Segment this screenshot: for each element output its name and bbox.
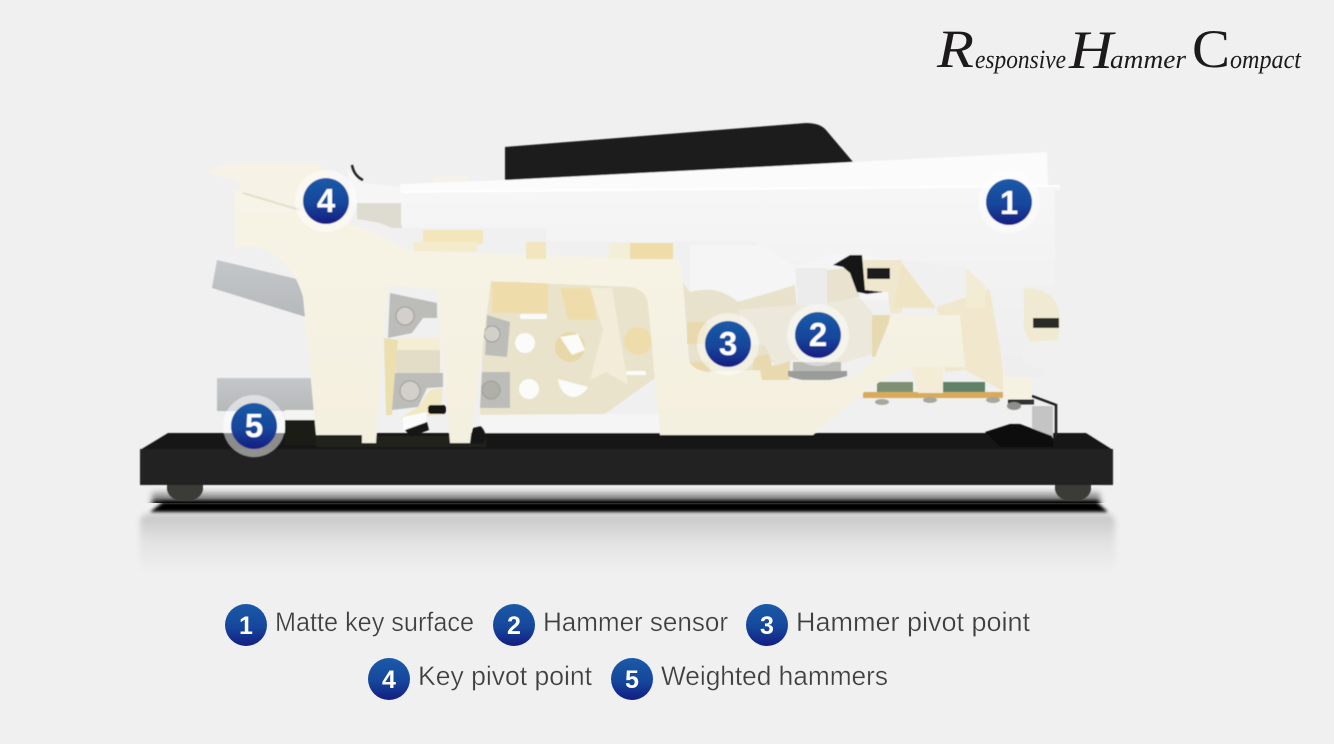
- legend item 4: [368, 658, 592, 700]
- frame shadow line: [243, 193, 300, 210]
- legend item 5: Weighted hammers: [661, 661, 888, 691]
- metal bracket: [1007, 396, 1056, 440]
- upper weight: [212, 260, 306, 317]
- lower support columns: [910, 366, 943, 393]
- right guide: [609, 243, 633, 259]
- cream triangle: [893, 263, 936, 308]
- felt and damper: [285, 410, 486, 447]
- marker 2: [787, 304, 849, 366]
- legend item 4: 4: [382, 666, 396, 694]
- lower left amber strip: [384, 338, 398, 415]
- inner slots: [520, 314, 646, 375]
- hinge shade: [357, 203, 402, 228]
- legend item 5: [611, 658, 888, 700]
- right side mechanism: [683, 255, 1060, 447]
- mid beige block: [396, 350, 440, 374]
- key top surface: [400, 152, 1048, 192]
- PCB: [863, 382, 1003, 405]
- metal hammer weights: [212, 260, 486, 447]
- title: C: [1192, 19, 1230, 79]
- cream rear tail: [207, 163, 350, 225]
- legend item 4: Key pivot point: [418, 661, 592, 691]
- key rib: [966, 268, 985, 308]
- legend item 1: Matte key surface: [275, 607, 474, 637]
- title: esponsive: [975, 45, 1066, 74]
- rubber feet: [167, 484, 1091, 501]
- legend item 5: 5: [625, 666, 639, 694]
- black hardware between legs: [405, 405, 486, 444]
- legend item 2: [493, 604, 728, 646]
- felt mount: [862, 260, 902, 313]
- hinge top block: [433, 176, 467, 186]
- screws: [396, 307, 500, 401]
- cream key frame: [235, 190, 965, 443]
- piano key action illustration: [140, 123, 1113, 501]
- top guide pieces: [413, 230, 673, 259]
- key connector: [1003, 375, 1031, 399]
- beige cam: [827, 268, 860, 303]
- marker 4: 4: [317, 182, 336, 219]
- legend item 1: 1: [239, 612, 253, 640]
- marker 1: 1: [1000, 184, 1018, 221]
- left guide upper: [423, 230, 483, 244]
- hinge white arm: [347, 167, 402, 205]
- hinge black mark: [352, 165, 363, 180]
- floor band under base: [152, 485, 1100, 503]
- marker 5: [223, 395, 285, 457]
- upper hammer plate: [388, 293, 437, 338]
- key edge highlight: [402, 186, 1060, 192]
- hammer mass: [480, 281, 655, 415]
- title: R: [936, 19, 974, 79]
- lower hammer plate right: [480, 372, 510, 408]
- lower cream lever: [400, 388, 442, 418]
- marker 3: [697, 313, 759, 375]
- open window behind action: [480, 245, 900, 433]
- sensor stem: [795, 268, 827, 305]
- base front face: [140, 449, 1113, 485]
- rear hammer disc: [683, 283, 800, 372]
- lower hammer plate: [392, 373, 443, 410]
- legend item 2: 2: [507, 612, 521, 640]
- marker 1: [978, 171, 1040, 233]
- mid cream block: [398, 338, 440, 350]
- black regulating part: [833, 255, 883, 294]
- base top face: [140, 433, 1113, 450]
- amber guide: [630, 243, 673, 259]
- number markers: [223, 170, 1040, 457]
- legend item 2: Hammer sensor: [543, 607, 728, 637]
- legend item 3: [746, 604, 1030, 646]
- marker 5: 5: [245, 407, 263, 444]
- white struts: [590, 288, 628, 385]
- small guide: [526, 242, 546, 259]
- left guide lower: [413, 242, 477, 252]
- legend item 3: 3: [760, 612, 774, 640]
- holes: [515, 333, 588, 399]
- hammer inner body: [384, 281, 655, 444]
- key hinge: [347, 165, 467, 228]
- lower weight: [217, 378, 315, 411]
- amber inner parts: [492, 282, 652, 355]
- bracket clip: [985, 424, 1054, 447]
- legend item 1: [225, 604, 474, 646]
- legend item 3: Hammer pivot point: [796, 607, 1030, 637]
- title: ompact: [1230, 45, 1302, 74]
- white hammer arm: [738, 298, 873, 366]
- marker 2: 2: [809, 316, 827, 353]
- marker 3: 3: [719, 325, 737, 362]
- title: ammer: [1110, 45, 1187, 74]
- white gap: [403, 412, 427, 430]
- title: H: [1068, 20, 1116, 80]
- amber behind curve: [872, 315, 892, 357]
- base plate: [140, 433, 1113, 501]
- amber lower parts: [687, 322, 790, 380]
- rear cream upright: [937, 288, 1005, 392]
- black key behind: [505, 123, 853, 181]
- legend: [225, 604, 1030, 700]
- sensor rubber: [788, 362, 847, 381]
- floor reflection: [140, 514, 1115, 574]
- white key: [400, 152, 1060, 377]
- base shadow: [150, 502, 1108, 512]
- hammer hole with tab: [555, 332, 585, 362]
- black felt: [867, 268, 890, 279]
- upper hammer plate right: [485, 315, 510, 357]
- key side: [401, 186, 1060, 377]
- marker 4: [295, 170, 357, 232]
- front felt assembly: [1024, 288, 1060, 342]
- title: [936, 19, 1302, 80]
